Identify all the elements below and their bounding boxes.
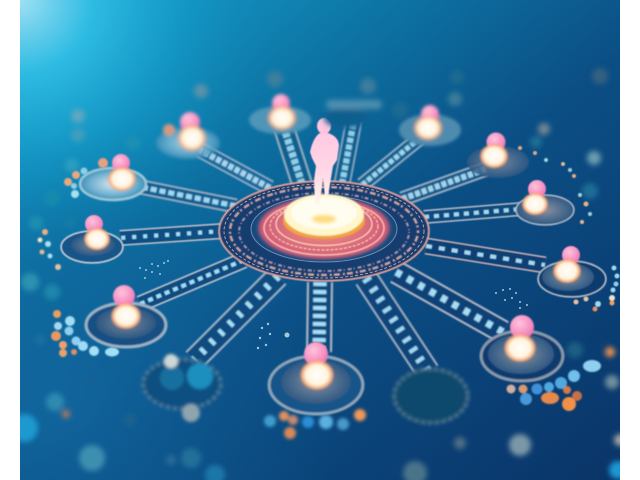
spoke: lower left one: [140, 260, 244, 304]
spoke: upper right three: [424, 209, 522, 217]
right white margin: [620, 0, 640, 480]
spoke: upper left two: [136, 186, 236, 206]
node: dark sphere cog lower left: [143, 354, 221, 422]
spoke: lower left two: [194, 276, 278, 360]
node: upper right three: [516, 180, 574, 225]
spoke: upper right two: [402, 169, 486, 199]
spoke: upper left one: [200, 150, 270, 188]
node: lower right: [481, 315, 563, 381]
beads: right edge cluster: [518, 146, 620, 312]
node: right: [538, 246, 606, 297]
node: top left: [249, 94, 311, 134]
spoke: upper right one: [362, 138, 420, 185]
human figure: [310, 118, 339, 204]
node: upper right one: [399, 105, 461, 146]
spoke: right: [426, 246, 545, 265]
beads: lower right cluster: [506, 360, 601, 411]
node: bottom: [269, 342, 363, 414]
spoke: left: [120, 231, 224, 238]
spoke: bottom: [319, 282, 320, 352]
spoke: lower right one: [396, 272, 503, 332]
spoke: top right: [342, 120, 354, 184]
spoke: top left: [284, 128, 302, 184]
node: lower left: [86, 285, 166, 347]
central hub disc: [219, 181, 429, 281]
spoke: lower right two: [366, 278, 428, 372]
beads: bottom cluster: [264, 409, 366, 439]
node: upper left two: [80, 154, 146, 200]
left white margin: [0, 0, 20, 480]
node: upper right two: [467, 132, 529, 178]
node: left: [61, 215, 123, 263]
beads: left clusters: [38, 158, 119, 357]
tiny specks: [139, 260, 528, 349]
node: top right chip: [324, 100, 382, 128]
node: dark teal cog lower right: [394, 369, 468, 423]
node: upper left one: [156, 112, 220, 159]
glowing central platform: [283, 194, 365, 239]
